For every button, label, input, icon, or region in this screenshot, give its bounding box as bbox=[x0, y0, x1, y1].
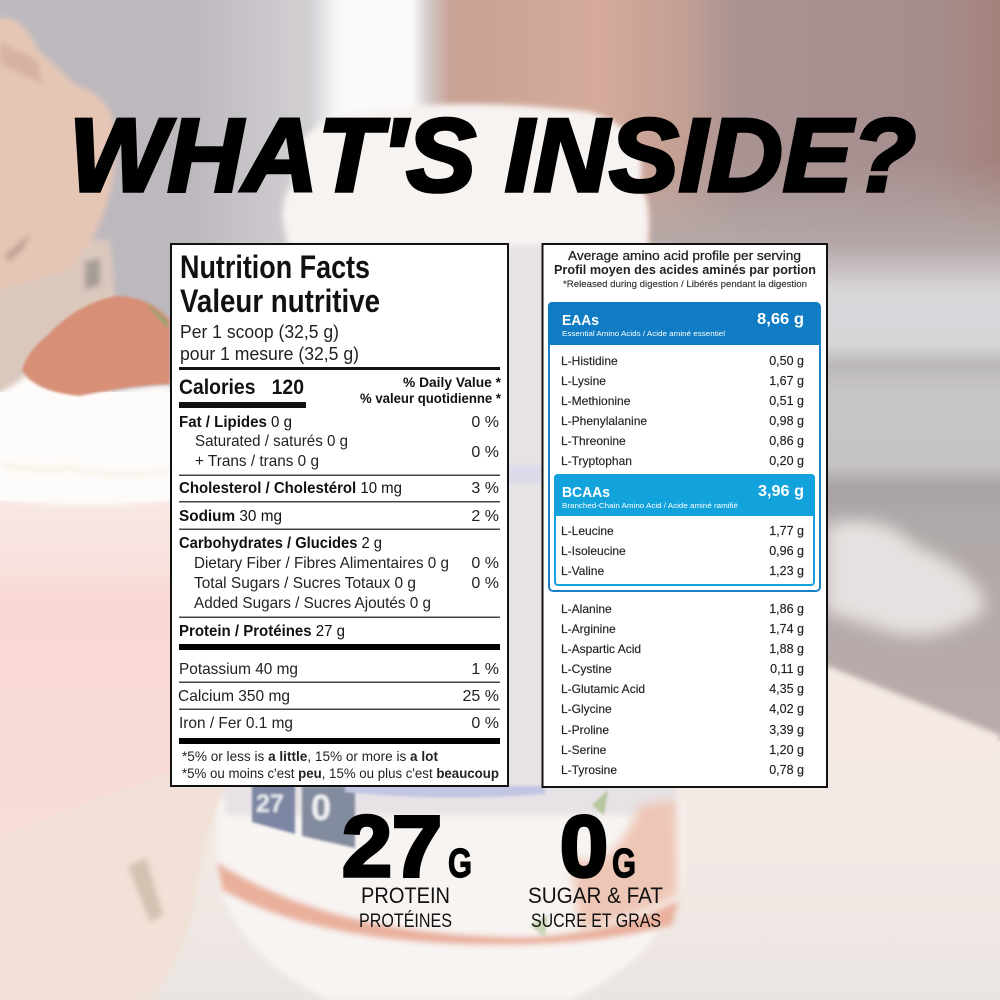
carbohydrate rows: Total Sugars / Sucres Totaux 0 g bbox=[194, 575, 416, 592]
carbohydrate rows: Carbohydrates / Glucides 2 g bbox=[179, 535, 382, 552]
fat rows: Fat / Lipides 0 g bbox=[179, 414, 292, 431]
carbohydrate rows: 0 % bbox=[471, 575, 499, 592]
jar label badges: 27 bbox=[256, 790, 284, 818]
title: WHAT'S INSIDE? bbox=[69, 98, 916, 214]
whipped cream bbox=[0, 376, 172, 505]
hand, upper left bbox=[0, 18, 116, 405]
daily value header: % valeur quotidienne * bbox=[360, 390, 502, 406]
BCAA rows: L-Valine bbox=[561, 564, 604, 578]
BCAA header: Branched-Chain Amino Acid / Acide aminé ramifié bbox=[562, 501, 738, 510]
stat: 0 g sugar and fat: SUGAR & FAT bbox=[528, 883, 663, 908]
fat rows: 0 % bbox=[471, 414, 499, 431]
stat: 0 g sugar and fat: SUCRE ET GRAS bbox=[531, 911, 661, 932]
EAA header bbox=[548, 302, 820, 345]
other amino acid rows: L-Glutamic Acid bbox=[561, 682, 645, 696]
iron row bbox=[179, 715, 499, 732]
calcium row: Calcium 350 mg bbox=[178, 688, 290, 705]
amino heading: Average amino acid profile per serving bbox=[568, 248, 801, 263]
BCAA block bbox=[554, 474, 815, 585]
amino heading: Profil moyen des acides aminés par portion bbox=[554, 262, 816, 277]
sodium row: Sodium 30 mg bbox=[179, 508, 282, 525]
EAA header: 8,66 g bbox=[757, 311, 804, 328]
other amino acid rows: 3,39 g bbox=[769, 723, 804, 737]
stat: 27 g protein bbox=[342, 799, 472, 932]
panel: nutrition facts bbox=[171, 244, 508, 786]
serving size: pour 1 mesure (32,5 g) bbox=[180, 344, 359, 364]
EAA rows: 0,98 g bbox=[769, 414, 804, 428]
other amino acid rows: L-Aspartic Acid bbox=[561, 642, 641, 656]
cholesterol row: Cholesterol / Cholestérol 10 mg bbox=[179, 480, 402, 497]
nutrition heading: Nutrition Facts bbox=[180, 249, 370, 285]
hand, lower left bbox=[0, 772, 225, 1000]
EAA rows: L-Phenylalanine bbox=[561, 414, 647, 428]
other amino acid rows: L-Arginine bbox=[561, 622, 616, 636]
BCAA rows bbox=[561, 524, 804, 578]
strawberry art on jar label bbox=[570, 800, 678, 930]
stat: 0 g sugar and fat: 0 bbox=[560, 799, 608, 895]
fat rows: 0 % bbox=[471, 444, 499, 461]
calcium row: 25 % bbox=[463, 688, 499, 705]
cholesterol row: 3 % bbox=[471, 480, 499, 497]
amino heading bbox=[554, 248, 816, 289]
other amino acid rows: 1,20 g bbox=[769, 743, 804, 757]
EAA rows: 0,50 g bbox=[769, 354, 804, 368]
stat: 0 g sugar and fat bbox=[528, 799, 663, 932]
footnote: *5% or less is a little, 15% or more is a lot bbox=[182, 749, 438, 764]
BCAA rows: L-Isoleucine bbox=[561, 544, 626, 558]
other amino acid rows: L-Alanine bbox=[561, 602, 612, 616]
EAA rows: 0,20 g bbox=[769, 454, 804, 468]
other amino acid rows bbox=[561, 602, 804, 777]
stat: 27 g protein: 27 bbox=[342, 799, 442, 895]
EAA rows: 1,67 g bbox=[769, 374, 804, 388]
other amino acid rows: 4,35 g bbox=[769, 682, 804, 696]
carbohydrate rows bbox=[179, 535, 499, 612]
other amino acid rows: 4,02 g bbox=[769, 702, 804, 716]
other amino acid rows: 1,86 g bbox=[769, 602, 804, 616]
EAA rows: L-Lysine bbox=[561, 374, 606, 388]
carbohydrate rows: 0 % bbox=[471, 555, 499, 572]
other amino acid rows: L-Serine bbox=[561, 743, 607, 757]
sodium row: 2 % bbox=[471, 508, 499, 525]
BCAA rows: 1,77 g bbox=[769, 524, 804, 538]
iron row: 0 % bbox=[471, 715, 499, 732]
BCAA rows: 1,23 g bbox=[769, 564, 804, 578]
BCAA header bbox=[554, 474, 815, 516]
other amino acid rows: L-Glycine bbox=[561, 702, 612, 716]
calories: Calories 120 bbox=[179, 376, 304, 399]
EAA rows: L-Histidine bbox=[561, 354, 618, 368]
daily value header: % Daily Value * bbox=[403, 374, 502, 390]
BCAA header: BCAAs bbox=[562, 484, 610, 501]
potassium row bbox=[179, 661, 499, 678]
EAA block bbox=[548, 302, 820, 591]
calcium row bbox=[178, 688, 499, 705]
amino heading: *Released during digestion / Libérés pendant la digestion bbox=[563, 279, 807, 289]
stat: 27 g protein: PROTÉINES bbox=[359, 911, 452, 932]
EAA rows: L-Threonine bbox=[561, 434, 626, 448]
other amino acid rows: L-Cystine bbox=[561, 662, 612, 676]
footnote bbox=[182, 749, 499, 781]
other amino acid rows: 0,78 g bbox=[769, 763, 804, 777]
sodium row bbox=[179, 508, 499, 525]
daily value header bbox=[360, 374, 502, 406]
footnote: *5% ou moins c'est peu, 15% ou plus c'est beaucoup bbox=[182, 766, 499, 781]
panel: amino acid profile bbox=[542, 244, 827, 787]
fat rows bbox=[179, 414, 499, 470]
fat rows: + Trans / trans 0 g bbox=[195, 453, 319, 470]
potassium row: 1 % bbox=[471, 661, 499, 678]
protein row: Protein / Protéines 27 g bbox=[179, 623, 345, 640]
other amino acid rows: 1,88 g bbox=[769, 642, 804, 656]
carbohydrate rows: Dietary Fiber / Fibres Alimentaires 0 g bbox=[194, 555, 449, 572]
jar label badges bbox=[252, 465, 545, 848]
fat rows: Saturated / saturés 0 g bbox=[195, 433, 348, 450]
EAA rows: L-Tryptophan bbox=[561, 454, 632, 468]
nutrition heading: Valeur nutritive bbox=[180, 283, 380, 319]
BCAA rows: L-Leucine bbox=[561, 524, 614, 538]
BCAA rows: 0,96 g bbox=[769, 544, 804, 558]
calories bbox=[179, 376, 306, 408]
EAA header: EAAs bbox=[562, 312, 599, 329]
jar label badges: 0 bbox=[311, 787, 331, 828]
other amino acid rows: 1,74 g bbox=[769, 622, 804, 636]
EAA rows: 0,86 g bbox=[769, 434, 804, 448]
table surface bbox=[0, 655, 1000, 1000]
other amino acid rows: L-Tyrosine bbox=[561, 763, 617, 777]
strawberry on top bbox=[22, 296, 170, 396]
stat: 27 g protein: G bbox=[448, 840, 472, 886]
protein row bbox=[179, 623, 500, 650]
other amino acid rows: 0,11 g bbox=[770, 662, 804, 676]
stat: 27 g protein: PROTEIN bbox=[361, 883, 450, 908]
serving size bbox=[180, 322, 359, 364]
EAA header: Essential Amino Acids / Acide aminé essentiel bbox=[562, 329, 725, 338]
EAA rows bbox=[561, 354, 804, 468]
other amino acid rows: L-Proline bbox=[561, 723, 609, 737]
iron row: Iron / Fer 0.1 mg bbox=[179, 715, 293, 732]
carbohydrate rows: Added Sugars / Sucres Ajoutés 0 g bbox=[194, 595, 431, 612]
EAA rows: L-Methionine bbox=[561, 394, 631, 408]
stat: 0 g sugar and fat: G bbox=[612, 840, 636, 886]
nutrition heading bbox=[180, 249, 380, 319]
serving size: Per 1 scoop (32,5 g) bbox=[180, 322, 339, 342]
milkshake glass bbox=[0, 495, 172, 840]
potassium row: Potassium 40 mg bbox=[179, 661, 298, 678]
jar bbox=[217, 104, 685, 1000]
EAA rows: 0,51 g bbox=[769, 394, 804, 408]
BCAA header: 3,96 g bbox=[758, 483, 804, 500]
